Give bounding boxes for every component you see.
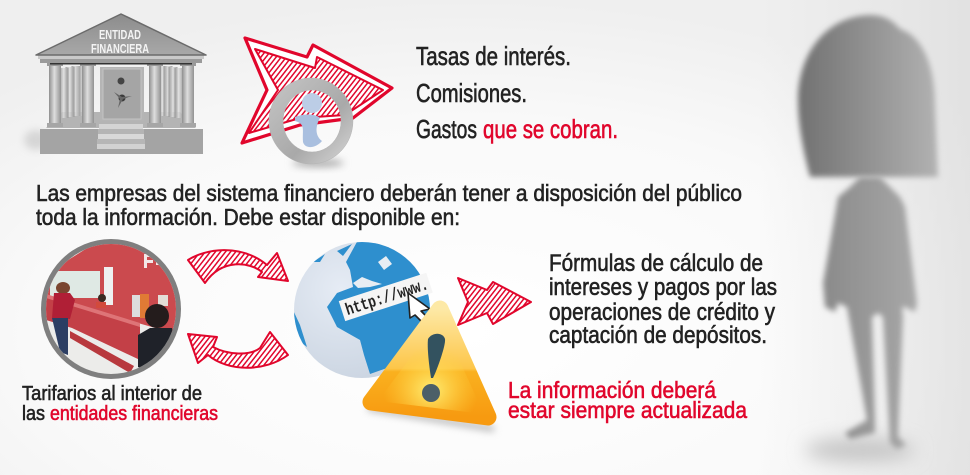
arrow: to formulas xyxy=(458,278,531,325)
bank label: FINANCIERA xyxy=(91,41,149,56)
text: list of charges: Comisiones. xyxy=(416,78,527,108)
counter xyxy=(46,296,140,360)
text: list of charges: Tasas de interés. xyxy=(416,41,571,71)
text: formulas: intereses y pagos por las xyxy=(549,274,777,301)
text: main statement xyxy=(36,180,742,230)
icon: information arrows xyxy=(242,38,392,167)
cursor arrow xyxy=(408,293,430,321)
photo customer xyxy=(52,282,75,355)
bank stairs xyxy=(97,124,145,149)
photo seated client xyxy=(138,304,172,368)
information letter i xyxy=(295,93,322,147)
globe sphere xyxy=(294,242,430,378)
silhouette figure xyxy=(798,15,938,462)
door xyxy=(104,267,113,305)
information ring xyxy=(269,78,353,164)
text: update warning: estar siempre actualizada xyxy=(508,397,748,423)
bank label: ENTIDAD xyxy=(99,27,141,42)
text: update warning xyxy=(508,377,748,423)
text: formulas: captación de depósitos. xyxy=(549,322,767,349)
bank ground shadow xyxy=(24,130,48,150)
icon: bank building xyxy=(24,14,206,154)
text: formulas: operaciones de crédito y xyxy=(549,299,775,326)
bank rear columns xyxy=(60,66,184,118)
photo scene xyxy=(46,244,176,374)
triangle glow xyxy=(378,318,484,414)
bank pediment xyxy=(36,14,206,55)
photo: bank counter xyxy=(40,239,185,380)
text: main statement: Las empresas del sistema financiero deberán tener a disposición del público xyxy=(36,180,742,206)
triangle shape xyxy=(371,309,488,417)
bank floor xyxy=(46,112,196,128)
double arrow outline and hatching xyxy=(242,38,392,143)
text: update warning: La información deberá xyxy=(508,377,717,403)
url bar xyxy=(339,273,433,322)
bank label xyxy=(91,27,149,56)
triangle shadow xyxy=(368,408,494,429)
silhouette head xyxy=(798,15,938,177)
text: list of charges xyxy=(416,41,618,144)
bank base xyxy=(40,129,203,154)
red wall xyxy=(47,244,176,332)
window xyxy=(50,271,100,298)
globe land xyxy=(293,240,432,374)
arrow: bottom exchange xyxy=(188,332,288,368)
text: formulas xyxy=(549,250,777,349)
bank vault door xyxy=(100,67,144,121)
bank entablature xyxy=(38,55,204,64)
icon: warning triangle xyxy=(368,309,494,429)
text: list of charges: que se cobran. xyxy=(483,114,618,144)
arrow: top exchange xyxy=(188,250,288,283)
bank front columns xyxy=(47,63,196,127)
wall logo xyxy=(144,254,159,268)
photo ring xyxy=(41,239,181,379)
exclamation mark xyxy=(422,334,445,402)
ground shadow xyxy=(805,438,915,462)
text: list of charges: Gastos xyxy=(416,114,477,144)
floor xyxy=(62,356,96,380)
text: main statement: toda la información. Debe estar disponible en: xyxy=(36,204,460,230)
text: formulas: Fórmulas de cálculo de xyxy=(549,250,763,277)
photo clerk xyxy=(96,294,106,308)
text: tariff caption: las xyxy=(22,402,45,425)
brochures xyxy=(132,294,168,318)
text: tariff caption xyxy=(22,382,218,425)
icon: globe xyxy=(293,240,433,378)
url bar: http://www. xyxy=(343,276,431,321)
silhouette body xyxy=(823,177,917,449)
text: tariff caption: Tarifarios al interior de xyxy=(22,382,202,405)
text: tariff caption: entidades financieras xyxy=(50,402,218,425)
information ring shadow xyxy=(292,159,344,167)
counter stripe xyxy=(70,331,134,373)
